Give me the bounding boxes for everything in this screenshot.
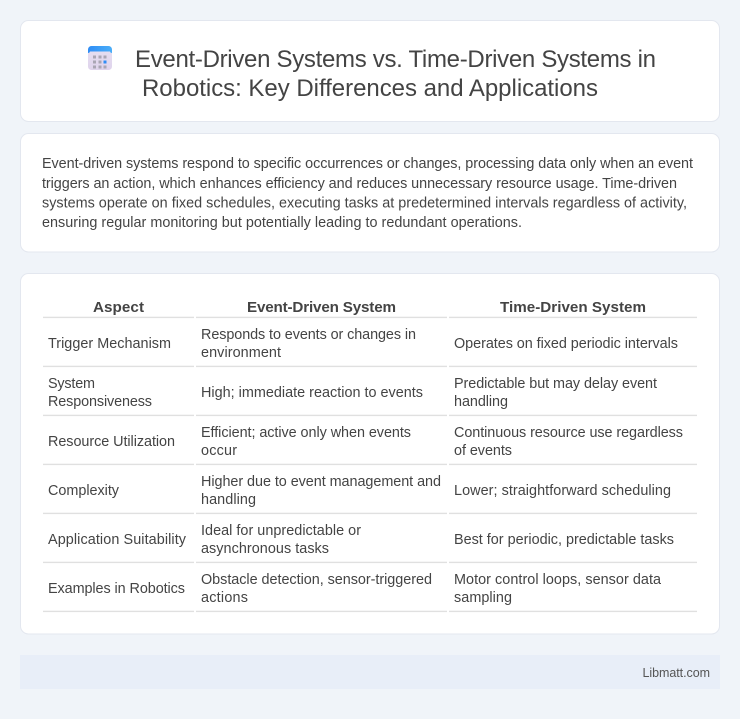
row: examples in robotics: sampling	[454, 590, 512, 606]
row: complexity: Higher due to event management and	[201, 474, 441, 490]
row: examples in robotics: Obstacle detection, sensor-triggered	[201, 572, 432, 588]
row: system responsiveness: System	[48, 376, 95, 392]
row: trigger mechanism: environment	[201, 345, 281, 361]
table header: Event-Driven System	[247, 299, 396, 316]
row: complexity	[48, 474, 671, 508]
row: examples in robotics: Motor control loops, sensor data	[454, 572, 661, 588]
text block: description: systems operate on fixed schedules, executing tasks at predetermined intervals regardless of activity,	[42, 196, 687, 212]
row: application suitability: Best for periodic, predictable tasks	[454, 532, 674, 548]
title: Robotics: Key Differences and Applications	[142, 75, 598, 102]
row: application suitability: Application Suitability	[48, 532, 187, 548]
title: Event-Driven Systems vs. Time-Driven Systems in	[135, 46, 656, 73]
row: trigger mechanism: Trigger Mechanism	[48, 336, 171, 352]
row: examples in robotics: actions	[201, 590, 248, 606]
panel: title card	[20, 20, 720, 122]
text block: description	[42, 156, 693, 231]
row: system responsiveness: Responsiveness	[48, 394, 152, 410]
row: complexity: handling	[201, 492, 256, 508]
table header: Time-Driven System	[500, 299, 646, 316]
icon: calendar	[88, 46, 112, 70]
row: examples in robotics: Examples in Robotics	[48, 581, 185, 597]
title	[135, 46, 656, 102]
row: resource utilization: Resource Utilization	[48, 434, 175, 450]
footer: Libmatt.com	[642, 666, 710, 680]
row: trigger mechanism: Operates on fixed periodic intervals	[454, 336, 678, 352]
panel: description	[20, 134, 720, 252]
row: resource utilization: occur	[201, 443, 237, 459]
row: trigger mechanism: Responds to events or changes in	[201, 327, 416, 343]
row: resource utilization: Continuous resource use regardless	[454, 425, 683, 441]
row: resource utilization: Efficient; active only when events	[201, 425, 411, 441]
table header	[93, 299, 646, 316]
row: resource utilization	[48, 425, 683, 459]
text block: description: Event-driven systems respond to specific occurrences or changes, processing data only when an event	[42, 156, 693, 172]
row: complexity: Complexity	[48, 483, 120, 499]
table header: Aspect	[93, 299, 144, 316]
panel: comparison table	[20, 274, 720, 634]
footer	[20, 655, 720, 689]
row: application suitability	[48, 523, 674, 557]
row: system responsiveness: Predictable but may delay event	[454, 376, 657, 392]
row: complexity: Lower; straightforward scheduling	[454, 483, 671, 499]
row: trigger mechanism	[48, 327, 678, 361]
row: system responsiveness: handling	[454, 394, 508, 410]
row: examples in robotics	[48, 572, 661, 606]
row: resource utilization: of events	[454, 443, 512, 459]
row: system responsiveness: High; immediate reaction to events	[201, 385, 423, 401]
row: system responsiveness	[48, 376, 657, 410]
row: application suitability: asynchronous tasks	[201, 541, 329, 557]
text block: description: triggers an action, which enhances efficiency and reduces unnecessary resource usage. Time-driven	[42, 176, 677, 192]
text block: description: ensuring regular monitoring but potentially leading to redundant operations.	[42, 215, 522, 231]
row: application suitability: Ideal for unpredictable or	[201, 523, 361, 539]
